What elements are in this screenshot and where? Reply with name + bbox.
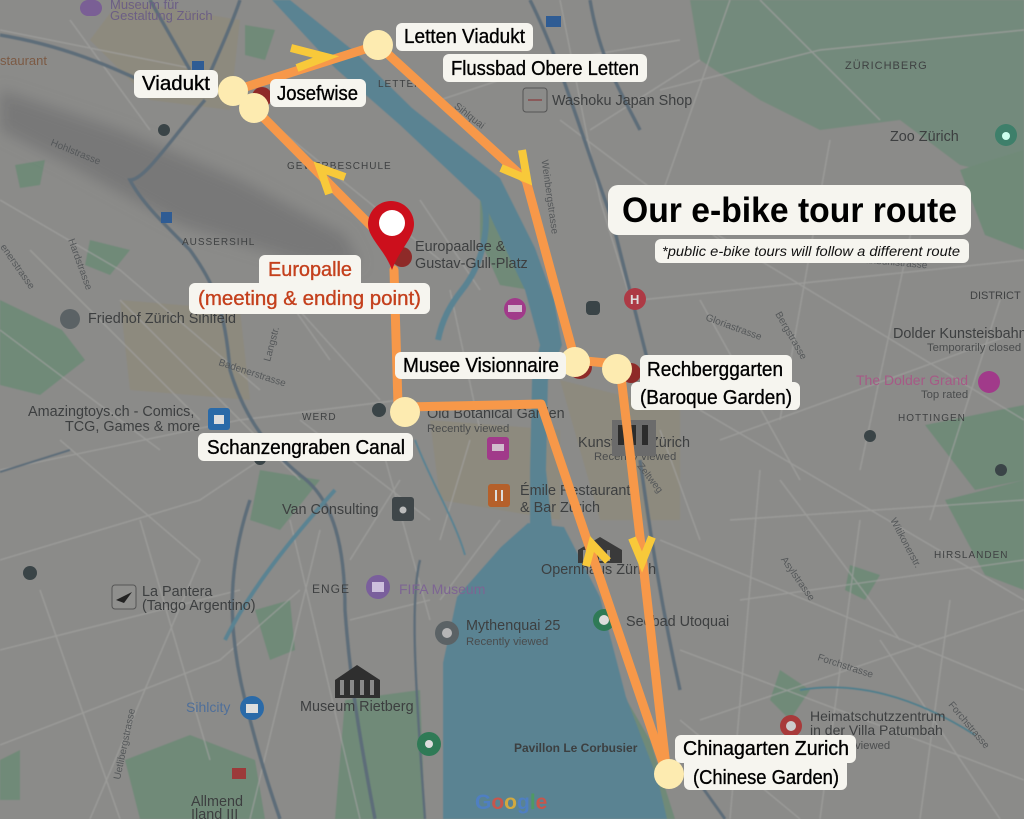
label: Chinagarten Zurich (Chinese Garden) (675, 735, 856, 790)
label: Chinagarten Zurich (Chinese Garden): Chinagarten Zurich (683, 738, 849, 760)
map place labels: Gestaltung Zürich (110, 8, 213, 23)
map place labels: Washoku Japan Shop (552, 93, 692, 109)
map place labels: Top rated (921, 389, 968, 401)
label: Viadukt (134, 70, 218, 98)
map place labels: Langstr. (262, 326, 282, 363)
label: Letten Viadukt: Letten Viadukt (404, 26, 525, 48)
subtitle note (655, 239, 969, 263)
map place labels: HIRSLANDEN (934, 550, 1008, 561)
stop markers (218, 30, 684, 789)
lake (443, 523, 667, 819)
map place labels: Allmend (191, 794, 243, 810)
map place labels: Opernhaus Zürich (541, 562, 656, 578)
map place labels: FIFA Museum (399, 581, 485, 597)
map place labels: Seebad Utoquai (626, 614, 729, 630)
map place labels: Asylstrasse (778, 555, 817, 603)
map place labels: WERD (302, 412, 337, 423)
map place labels: Krähbühlstrasse (855, 254, 928, 271)
map place labels: The Dolder Grand (856, 372, 968, 388)
warm areas (90, 0, 680, 520)
map place labels: LETTEN (378, 79, 422, 90)
map place labels: & Bar Zürich (520, 500, 600, 516)
map place labels: Sihlquai (452, 101, 487, 132)
map place labels: Europaallee & (415, 239, 506, 255)
railway yard (0, 90, 360, 265)
map place labels: Pavillon Le Corbusier (514, 741, 638, 755)
map place labels: Bergstrasse (772, 310, 809, 362)
map place labels: Forchstrasse (946, 700, 992, 752)
map place labels: Van Consulting (282, 502, 379, 518)
map place labels: Recently viewed (427, 423, 509, 435)
label: Musee Visionnaire: Musee Visionnaire (403, 355, 559, 377)
map place labels: Hohlstrasse (49, 138, 102, 168)
label: Rechberggarten (Baroque Garden): (Baroque Garden) (640, 387, 792, 409)
map place labels: staurant (0, 53, 47, 68)
map place labels: La Pantera (142, 584, 212, 600)
map place labels: Kunsthaus Zürich (578, 435, 690, 451)
map place labels: Old Botanical Garden (427, 406, 565, 422)
river (272, 0, 562, 526)
map place labels: Émile Restaurant (520, 482, 630, 499)
map place labels: Recently viewed (594, 451, 676, 463)
map place labels: Dolder Kunsteisbahn (893, 326, 1024, 342)
Schanzengraben canal (415, 440, 465, 555)
label: Europalle meeting and ending point: (meeting & ending point) (198, 288, 421, 310)
route line (233, 45, 667, 775)
map place labels: Zeltweg (635, 461, 665, 495)
map place labels: ZÜRICHBERG (845, 60, 928, 72)
map place labels: viewed (855, 740, 890, 752)
Google logo: Google (475, 791, 547, 814)
map place labels: GEWERBESCHULE (287, 161, 392, 172)
direction arrows (291, 48, 652, 566)
map place labels: Zoo Zürich (890, 129, 959, 145)
label: Europalle meeting and ending point (189, 255, 430, 314)
label: Rechberggarten (Baroque Garden) (631, 355, 800, 410)
map place labels: Witikonerstr. (887, 516, 923, 570)
map place labels: Weinbergstrasse (539, 159, 560, 235)
map place labels: Badenerstrasse (217, 357, 288, 390)
map place labels: in der Villa Patumbah (810, 722, 943, 738)
map place labels: Forchstrasse (816, 652, 875, 681)
meeting point pin (368, 201, 414, 270)
map place labels: HOTTINGEN (898, 413, 966, 424)
label: Europalle meeting and ending point: Europalle (268, 259, 352, 281)
map place labels: TCG, Games & more (65, 419, 200, 435)
label: Schanzengraben Canal: Schanzengraben Canal (207, 437, 405, 459)
label: Flussbad Obere Letten: Flussbad Obere Letten (451, 58, 639, 80)
map place labels: Heimatschutzzentrum (810, 708, 945, 724)
map place labels: AUSSERSIHL (182, 237, 255, 248)
map place labels: Amazingtoys.ch - Comics, (28, 404, 194, 420)
map place labels: Gustav-Gull-Platz (415, 256, 528, 272)
label: Rechberggarten (Baroque Garden): Rechberggarten (647, 359, 783, 381)
label: Viadukt: Viadukt (142, 73, 210, 95)
map place labels: Mythenquai 25 (466, 618, 560, 634)
Sihl branch (438, 190, 486, 340)
map place labels: Hardstrasse (65, 237, 94, 292)
map place labels: Museum Rietberg (300, 699, 414, 715)
map place labels: (Tango Argentino) (142, 598, 256, 614)
label: Chinagarten Zurich (Chinese Garden): (Chinese Garden) (693, 767, 839, 789)
subtitle note: *public e-bike tours will follow a different route (662, 243, 960, 259)
map place labels: ENGE (312, 582, 350, 596)
title: Our e-bike tour route (622, 191, 957, 230)
map place labels: DISTRICT (970, 290, 1021, 302)
map place labels: Recently viewed (466, 636, 548, 648)
map pins and icons: H (630, 292, 639, 307)
map place labels: Uetlibergstrasse (112, 707, 138, 781)
map place labels: Sihlcity (186, 699, 230, 715)
map place labels: Gloriastrasse (704, 312, 764, 343)
label: Josefwise: Josefwise (277, 83, 358, 105)
map place labels: Temporarily closed (927, 342, 1021, 354)
map place labels: Friedhof Zürich Sihlfeld (88, 311, 236, 327)
